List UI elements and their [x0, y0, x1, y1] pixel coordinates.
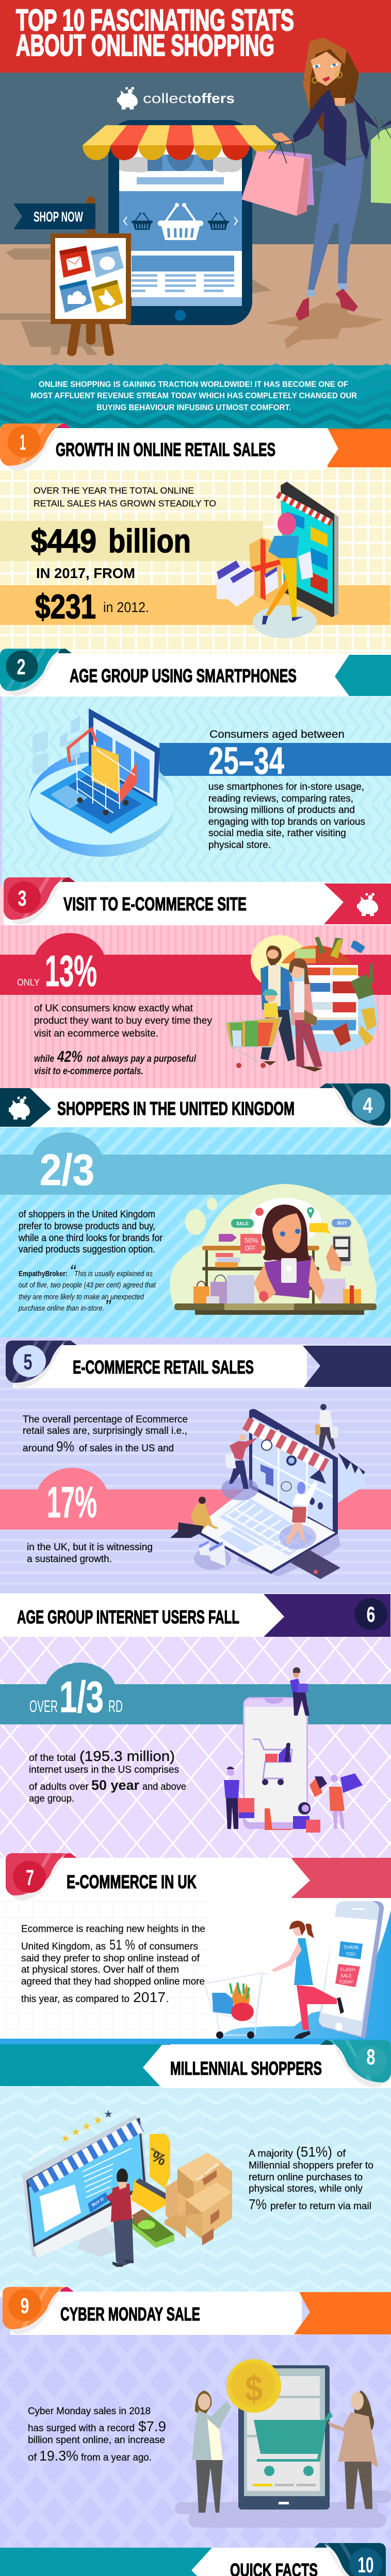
section 5 closing text: in the UK, but it is witnessing	[27, 1542, 153, 1553]
section 1 banner	[0, 421, 391, 471]
quote: “	[70, 1262, 76, 1281]
illustration: phone with shoppers	[224, 1667, 363, 1833]
section 7 text: 51 %	[109, 1937, 135, 1953]
section 2 text: browsing millions of products and	[208, 805, 355, 816]
section 1 text: OVER THE YEAR THE TOTAL ONLINE	[34, 485, 194, 496]
section 8 text: physical stores, while only	[249, 2183, 363, 2194]
section 2 text	[208, 728, 365, 851]
panel: section 7 e-commerce in uk	[0, 1851, 391, 2044]
section 5 banner	[6, 1338, 391, 1388]
section 4 banner: 4	[363, 1093, 373, 1118]
section 2 banner: 2	[17, 655, 26, 680]
button: thank you	[339, 1941, 363, 1959]
illustration: woman pushing cart into phone	[0, 1901, 391, 2044]
section 3 text: of UK consumers know exactly what	[34, 1003, 193, 1014]
button: flash sale today: FLASH	[340, 1967, 355, 1972]
section 6 text: age group.	[29, 1793, 74, 1804]
section 8 text: return online purchases to	[249, 2172, 363, 2183]
section 9 text: $7.9	[138, 2418, 166, 2434]
section 4 text: while a one third looks for brands for	[18, 1233, 163, 1244]
section 9 text: has surged with a record	[28, 2423, 135, 2434]
section 5 stat: 17%	[47, 1478, 97, 1527]
section 1 text: $231	[35, 587, 96, 625]
button: thank you: YOU	[346, 1952, 355, 1957]
illustration: shopper woman with bags	[241, 38, 391, 348]
intro text: BUYING BEHAVIOUR INFUSING UTMOST COMFORT.	[96, 403, 291, 412]
illustration: woman with smartphone and sale tags: BUY	[337, 1221, 347, 1226]
button: flash sale today: TODAY	[339, 1979, 353, 1985]
logo: collectoffers	[117, 87, 235, 109]
section 9 banner	[3, 2284, 391, 2335]
illustration: phone cart and coin: $	[245, 2368, 263, 2409]
icon: piggy bank	[357, 893, 378, 916]
section 7 text: Ecommerce is reaching new heights in the	[21, 1924, 205, 1935]
illustration: woman with smartphone and sale tags: OFF	[245, 1244, 255, 1252]
button: flash sale today: SALE	[340, 1973, 352, 1978]
section 9 banner: 9	[21, 2294, 29, 2318]
section 3 text: visit to e-commerce portals.	[34, 1066, 143, 1077]
stars: rating: ★	[71, 2127, 80, 2138]
panel: section 5 e-commerce retail sales	[0, 1337, 391, 1594]
section 3 text: not always pay a purposeful	[87, 1054, 197, 1064]
section 6 text: (195.3 million)	[79, 1748, 175, 1764]
illustration: online store on desktop monitor: FREE SHIPPING	[196, 2162, 220, 2183]
section 4 stat: 2/3	[40, 1146, 94, 1195]
illustration: laptop and shopping cart	[29, 708, 174, 857]
illustration: woman with smartphone and sale tags: 50%	[245, 1236, 258, 1244]
section 3 text	[34, 1003, 212, 1077]
button: flash sale today	[335, 1964, 360, 1987]
section 7 banner	[6, 1851, 391, 1901]
section 10 banner	[0, 2540, 391, 2576]
section 7 text: of consumers	[138, 1941, 198, 1952]
section 1 text: $449	[31, 522, 96, 560]
section 6 banner: AGE GROUP INTERNET USERS FALL	[17, 1606, 239, 1628]
illustration: family shopping in store	[225, 935, 378, 1072]
section 9 text: 19.3%	[39, 2448, 78, 2464]
header band with title	[0, 0, 391, 73]
section 1 text: IN 2017, FROM	[36, 565, 135, 581]
section 2 text: social media site, rather visiting	[208, 828, 346, 839]
illustration: woman shopping on phone	[217, 482, 338, 638]
section 8 banner: 8	[366, 2045, 376, 2070]
section 2 text: Consumers aged between	[209, 728, 345, 740]
illustration: woman with smartphone and sale tags	[170, 1184, 377, 1315]
section 5 banner: 5	[24, 1350, 32, 1375]
logo: collectoffers: collect	[143, 91, 192, 106]
section 4 text: of shoppers in the United Kingdom	[19, 1209, 155, 1220]
section 6 banner: 6	[366, 1602, 376, 1627]
section 3 banner	[4, 875, 391, 925]
button: thank you: THANK	[344, 1945, 359, 1951]
icon: piggy bank	[9, 1096, 30, 1120]
stars: rating	[61, 2109, 113, 2144]
panel: section 4 shoppers in the united kingdom	[0, 1081, 391, 1337]
quote: they are more likely to make an unexpected	[19, 1293, 144, 1301]
section 9 text: of	[28, 2452, 37, 2463]
section 6 stat: 1/3	[59, 1673, 104, 1722]
section 8 text: (51%)	[296, 2144, 332, 2160]
section 2 text: reading reviews, comparing rates,	[208, 793, 353, 804]
stars: rating: ★	[104, 2109, 113, 2120]
quote: out of five, two people (43 per cent) agreed that	[19, 1281, 156, 1290]
section 7 text: 2017	[133, 1989, 166, 2005]
intro text	[30, 380, 357, 412]
section 7 banner: 7	[26, 1866, 34, 1890]
section 7 text: this year, as compared to	[21, 1994, 129, 2005]
section 5 text: around	[23, 1443, 54, 1454]
section 1 text: RETAIL SALES HAS GROWN STEADILY TO	[34, 498, 216, 509]
section 5 text: 9%	[56, 1438, 74, 1454]
intro text: MOST AFFLUENT REVENUE STREAM TODAY WHICH HAS COMPLETELY CHANGED OUR	[30, 392, 357, 400]
illustration: online store on desktop monitor: BUY IT	[91, 2197, 105, 2208]
section 9 text: Cyber Monday sales in 2018	[28, 2406, 151, 2417]
section 8 banner: MILLENNIAL SHOPPERS	[170, 2058, 322, 2079]
section 3 text: visit an ecommerce website.	[34, 1028, 158, 1039]
illustration: online store on desktop monitor: discount	[150, 2147, 165, 2158]
section 6 stat	[29, 1673, 123, 1722]
illustration: online store on desktop monitor: %	[149, 2148, 169, 2169]
sign: shop now: SHOP NOW	[34, 209, 83, 225]
section 8 text: of	[337, 2148, 346, 2159]
section 9 banner: CYBER MONDAY SALE	[60, 2303, 200, 2325]
panel: section 10 quick facts	[0, 2540, 391, 2576]
illustration: woman with smartphone and sale tags: SALE	[236, 1221, 249, 1226]
section 6 text: internet users in the US comprises	[29, 1765, 179, 1775]
illustration: storefront phone	[108, 120, 252, 325]
section 7 text: at physical stores. Over half of them	[21, 1964, 179, 1975]
panel: intro	[0, 365, 391, 429]
panel: hero	[0, 0, 391, 366]
section 7 banner: E-COMMERCE IN UK	[67, 1871, 197, 1892]
section 3 banner: VISIT TO E-COMMERCE SITE	[63, 893, 247, 914]
stars: rating: ★	[93, 2115, 103, 2126]
section 2 text: engaging with top brands on various	[208, 817, 365, 827]
section 1 text: billion	[108, 522, 191, 560]
section 6 stat: OVER	[29, 1697, 58, 1716]
section 3 text: product they want to buy every time they	[34, 1015, 212, 1026]
section 5 text: The overall percentage of Ecommerce	[23, 1414, 188, 1425]
section 8 text: A majority	[249, 2148, 294, 2159]
section 6 stat: RD	[108, 1697, 123, 1716]
section 3 text: while	[34, 1054, 54, 1064]
section 6 text: 50 year	[91, 1777, 139, 1793]
panel: section 2 age group using smartphones	[0, 646, 391, 886]
section 1 text: in 2012.	[103, 599, 149, 615]
section 6 banner	[0, 1594, 390, 1637]
section 7 text: agreed that they had shopped online more	[21, 1976, 205, 1987]
section 7 text	[21, 1924, 205, 2005]
section 7 text: said they prefer to shop online instead of	[21, 1953, 200, 1964]
section 6 text: and above	[142, 1782, 186, 1792]
quote	[18, 1262, 156, 1316]
panel: section 3 visit to e-commerce site	[0, 875, 391, 1088]
panel: section 6 age group internet users fall	[0, 1594, 391, 1858]
quote: purchase online than in-store.	[18, 1304, 104, 1313]
illustration: notice board	[51, 233, 131, 356]
section 8 text: Millennial shoppers prefer to	[249, 2160, 373, 2171]
section 2 banner	[0, 646, 391, 697]
section 4 text: varied products suggestion option.	[19, 1244, 155, 1255]
section 3 stat	[17, 947, 97, 996]
panel: section 1 growth in online retail sales	[0, 421, 391, 653]
section 5 closing text	[27, 1542, 153, 1565]
section 8 text	[249, 2144, 373, 2212]
section 5 text: retail sales are, surprisingly small i.e.,	[23, 1426, 187, 1436]
section 1 text	[31, 485, 216, 625]
quote: EmpathyBroker:	[19, 1269, 68, 1278]
illustration: online store on desktop monitor	[22, 2109, 232, 2267]
quote: ”	[105, 1297, 111, 1316]
section 3 stat: ONLY	[17, 977, 40, 988]
section 5 text: of sales in the US and	[79, 1443, 174, 1454]
panel: section 8 millennial shoppers	[0, 2038, 391, 2292]
section 2 text: physical store.	[208, 840, 271, 851]
quote: This is usually explained as	[74, 1269, 153, 1278]
section 1 banner: GROWTH IN ONLINE RETAIL SALES	[56, 439, 275, 460]
section 3 text: 42%	[57, 1047, 83, 1065]
stars: rating: ★	[61, 2133, 70, 2144]
section 3 banner: 3	[18, 886, 27, 911]
section 5 text	[23, 1414, 188, 1454]
section 8 text: 7%	[249, 2196, 267, 2212]
section 8 text: prefer to return via mail	[270, 2201, 371, 2212]
section 6 text: of adults over	[29, 1782, 89, 1792]
section 5 closing text: a sustained growth.	[27, 1554, 112, 1565]
section 1 banner: 1	[20, 430, 26, 455]
section 8 banner	[0, 2038, 391, 2088]
section 7 text: .	[166, 1994, 169, 2005]
section 6 text	[29, 1748, 186, 1804]
section 4 text	[18, 1209, 163, 1255]
panel: section 9 cyber monday sale	[0, 2284, 391, 2548]
stars: rating: ★	[82, 2121, 91, 2132]
section 7 text: United Kingdom, as	[21, 1941, 106, 1952]
section 9 text: billion spent online, an increase	[28, 2435, 165, 2446]
section 4 banner	[0, 1081, 391, 1130]
section 3 stat: 13%	[45, 947, 97, 996]
section 4 text: prefer to browse products and buy,	[19, 1221, 155, 1232]
section 5 banner: E-COMMERCE RETAIL SALES	[73, 1357, 254, 1378]
sign: shop now	[13, 196, 95, 234]
intro text: ONLINE SHOPPING IS GAINING TRACTION WORLDWIDE! IT HAS BECOME ONE OF	[39, 380, 348, 389]
section 6 text: of the total	[29, 1753, 76, 1764]
section 2 banner: AGE GROUP USING SMARTPHONES	[70, 665, 297, 686]
illustration: isometric laptop storefront	[170, 1404, 365, 1579]
section 9 text	[28, 2406, 166, 2464]
illustration: phone cart and coin	[175, 2359, 391, 2528]
section 2 text: 25–34	[208, 739, 284, 782]
illustration: online store on desktop monitor: store rating .	[26, 2142, 56, 2164]
section 9 text: from a year ago.	[81, 2452, 152, 2463]
illustration: striped awning	[83, 125, 277, 160]
logo: collectoffers: offers	[192, 91, 235, 106]
section 4 banner: SHOPPERS IN THE UNITED KINGDOM	[57, 1098, 295, 1119]
section 2 text: use smartphones for in-store usage,	[208, 782, 364, 792]
